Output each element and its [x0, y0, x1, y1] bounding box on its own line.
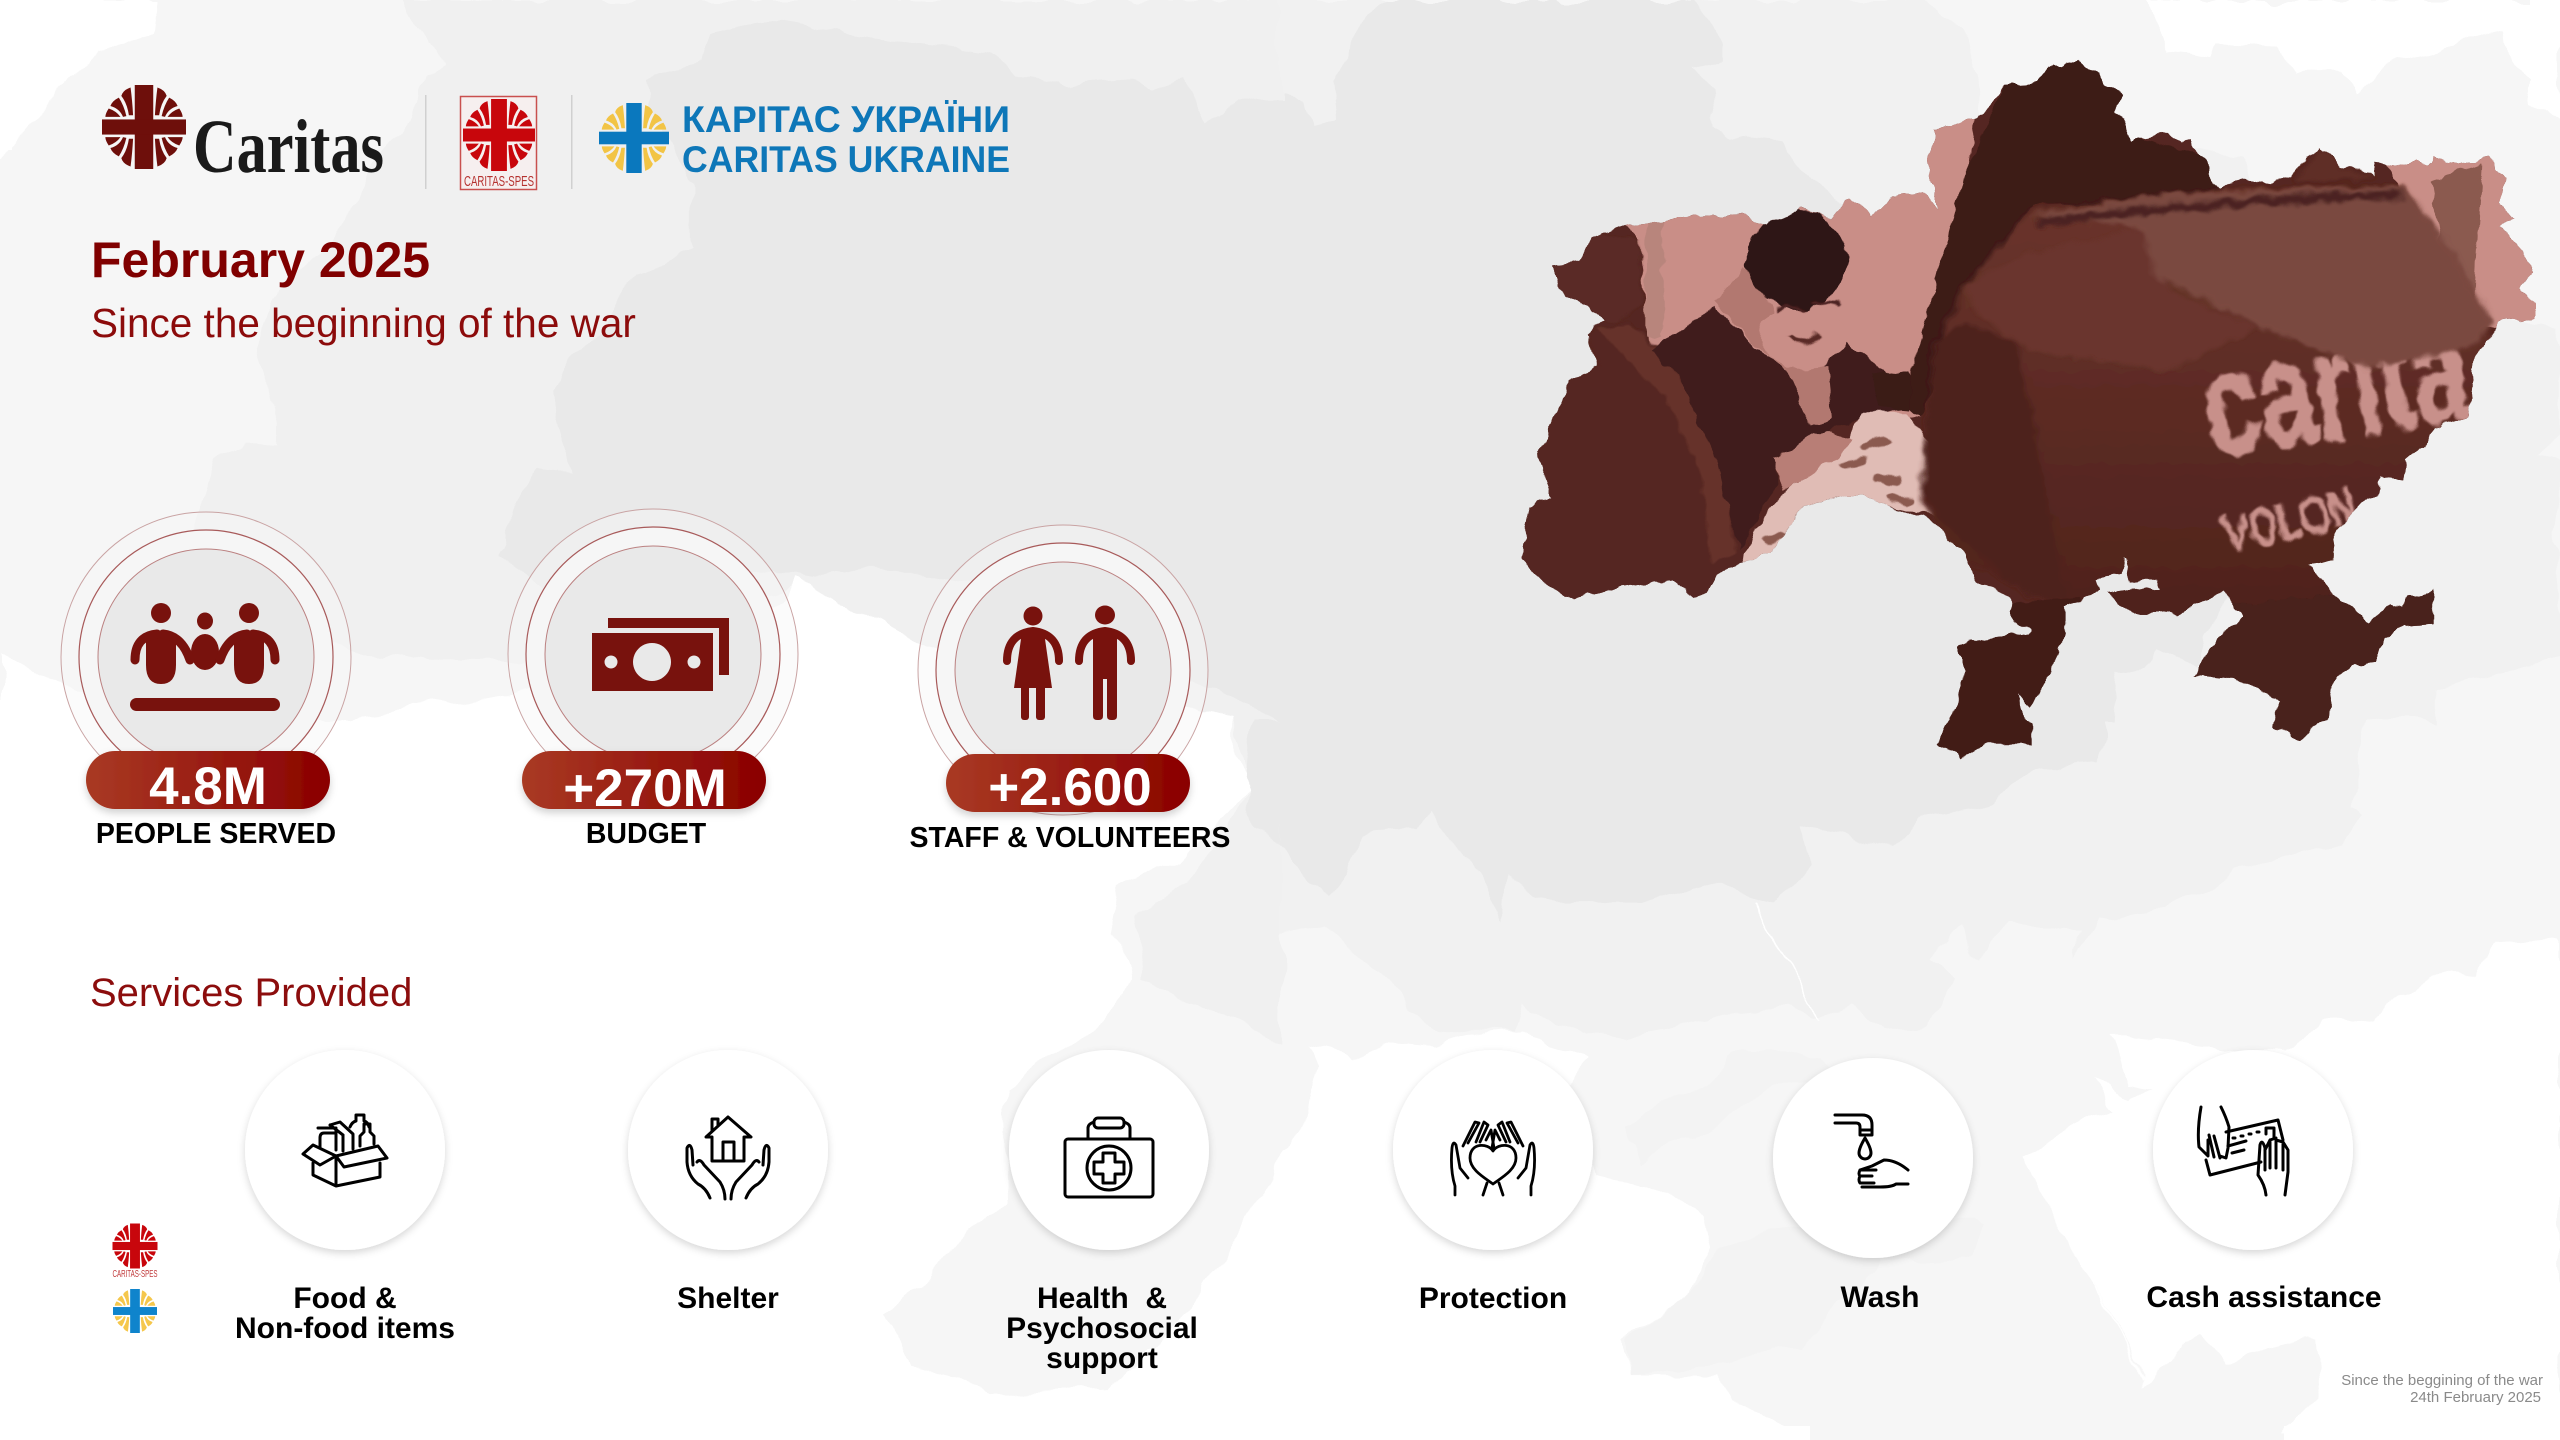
- icon: family: [130, 603, 280, 711]
- title: February 2025: [91, 232, 430, 288]
- label: health: Psychosocial: [1006, 1312, 1198, 1345]
- icon: hands exchanging card: [2198, 1107, 2288, 1195]
- footnote: 24th February 2025: [2410, 1389, 2541, 1406]
- label: health: Health &: [1037, 1282, 1167, 1315]
- Caritas logo: Caritas: [193, 105, 384, 189]
- photo lettering on jacket: VOLON: [2218, 478, 2362, 565]
- footnote: Since the beggining of the war: [2341, 1372, 2543, 1389]
- map of Ukraine filled with photo: [1522, 60, 2536, 760]
- label: food: Food &: [293, 1282, 397, 1315]
- pill: +2.600: +2.600: [988, 758, 1152, 817]
- Caritas Ukraine logo: КАРІТАС УКРАЇНИ: [682, 99, 1010, 140]
- rings 3: [918, 525, 1208, 815]
- label: food: Non-food items: [235, 1312, 455, 1345]
- icon: banknotes: [592, 618, 729, 691]
- pill: +270M: +270M: [563, 759, 727, 818]
- service: shelter: [628, 1050, 828, 1315]
- photo lettering on jacket: [2204, 348, 2470, 554]
- label: shelter: Shelter: [677, 1282, 779, 1315]
- Caritas Ukraine logo: [599, 99, 1010, 180]
- stat: staff and volunteers: [910, 525, 1230, 854]
- label: budget: BUDGET: [586, 818, 707, 850]
- icon: box of groceries: [303, 1115, 387, 1186]
- label: protection: Protection: [1419, 1282, 1567, 1315]
- icon: woman and man: [1007, 606, 1131, 720]
- pill: 4.8M: 4.8M: [149, 757, 267, 816]
- label: health: support: [1046, 1342, 1158, 1375]
- subtitle: Since the beginning of the war: [91, 300, 636, 346]
- stat: people served: [61, 512, 351, 850]
- label: cash assistance: Cash assistance: [2146, 1281, 2382, 1314]
- pill: +2.600: [946, 754, 1190, 817]
- icon: first aid kit: [1065, 1118, 1153, 1197]
- service: food and non-food items: [235, 1050, 455, 1345]
- service: cash assistance: [2146, 1050, 2382, 1314]
- service: wash: [1773, 1058, 1973, 1314]
- Caritas logo: [102, 85, 384, 189]
- icon: hands holding house: [687, 1117, 769, 1199]
- side logos: [112, 1224, 158, 1333]
- Caritas Ukraine logo: CARITAS UKRAINE: [682, 139, 1010, 180]
- label: wash: Wash: [1841, 1281, 1919, 1314]
- rings 1: [61, 512, 351, 802]
- side logos: CARITAS-SPES: [112, 1269, 158, 1280]
- heading: services provided: Services Provided: [90, 971, 412, 1015]
- label: people served: PEOPLE SERVED: [96, 818, 336, 850]
- rings 2: [508, 509, 798, 799]
- icon: hands holding heart: [1451, 1122, 1535, 1195]
- pill: 4.8M: [86, 751, 330, 816]
- stat: budget: [508, 509, 798, 850]
- icon: tap and hand: [1835, 1115, 1908, 1187]
- service: protection: [1393, 1050, 1593, 1315]
- Caritas-Spes logo: [460, 96, 536, 190]
- Caritas-Spes logo: CARITAS-SPES: [464, 173, 534, 190]
- pill: +270M: [522, 751, 766, 818]
- label: staff and volunteers: STAFF & VOLUNTEERS: [910, 822, 1230, 854]
- service: health and psychosocial support: [1006, 1050, 1209, 1375]
